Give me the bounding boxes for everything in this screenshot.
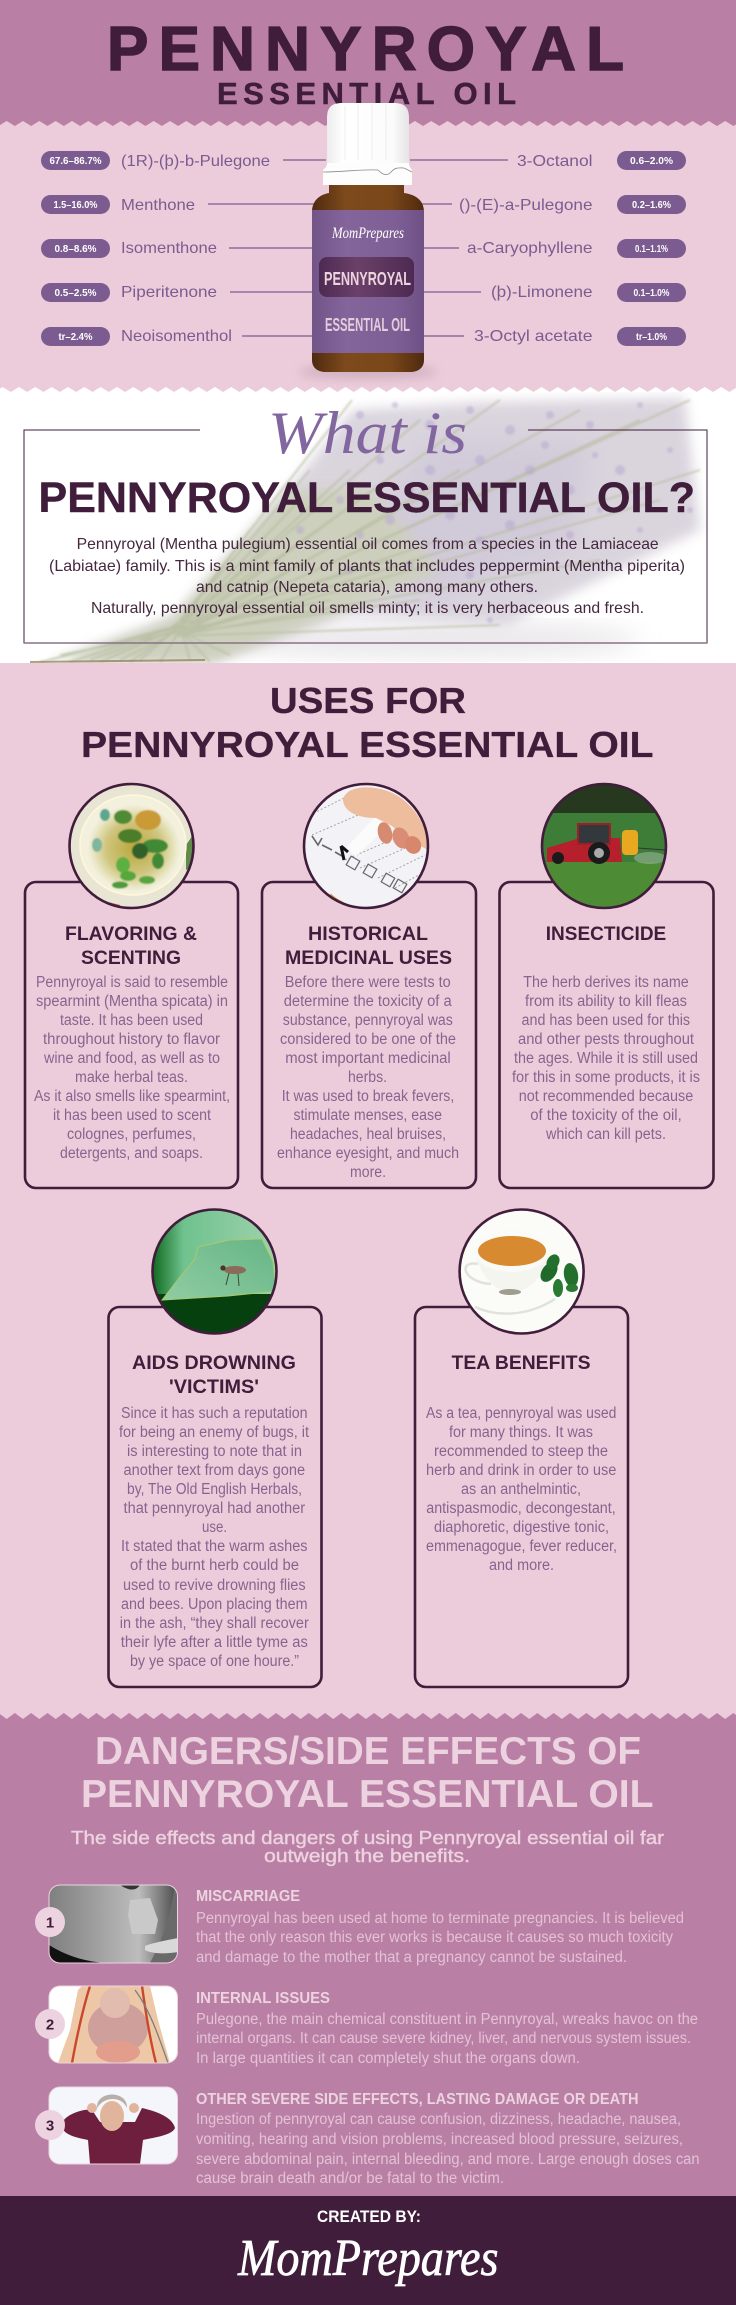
dangers section background xyxy=(0,1713,736,2196)
number badge 2 xyxy=(35,2009,65,2039)
item heading: OTHER SEVERE SIDE EFFECTS, LASTING DAMAGE OR DEATH xyxy=(196,2091,638,2108)
chemical constituents: left column: 67.6–86.7% xyxy=(50,155,102,167)
body text: use. xyxy=(202,1519,227,1536)
chemical constituents: left column: Menthone xyxy=(121,197,195,214)
body text: for this in some products, it is xyxy=(512,1069,700,1086)
body text xyxy=(512,974,700,1143)
item text: In large quantities it can completely shut the organs down. xyxy=(196,2050,580,2067)
danger item: internal issues xyxy=(35,1986,698,2067)
footer logo: MomPrepares xyxy=(237,2230,498,2287)
heading: pennyroyal essential oil?: PENNYROYAL ESSENTIAL OIL? xyxy=(38,474,695,522)
body text: antispasmodic, decongestant, xyxy=(426,1500,616,1517)
item text: severe abdominal pain, internal bleeding, and more. Large enough doses can xyxy=(196,2151,700,2168)
body text: not recommended because xyxy=(519,1088,693,1105)
icon: essential oil bottle xyxy=(298,103,438,379)
heading xyxy=(132,1352,296,1398)
body text: spearmint (Mentha spicata) in xyxy=(36,993,228,1010)
body text: Since it has such a reputation xyxy=(121,1405,308,1422)
body text: It stated that the warm ashes xyxy=(121,1538,308,1555)
uses section background xyxy=(0,663,736,1713)
photo: man holding head xyxy=(49,2087,178,2164)
chemical constituents: right column: 0.1–1.1% xyxy=(635,243,668,255)
body text: as an anthelmintic, xyxy=(461,1481,581,1498)
photo: dried pennyroyal bunch xyxy=(30,398,700,662)
body text: in the ash, “they shall recover xyxy=(120,1615,309,1632)
intro paragraph: Naturally, pennyroyal essential oil smells minty; it is very herbaceous and fresh. xyxy=(91,600,644,617)
body text: which can kill pets. xyxy=(545,1126,666,1143)
heading: FLAVORING & xyxy=(65,923,197,945)
item text: Pennyroyal has been used at home to terminate pregnancies. It is believed xyxy=(196,1910,684,1927)
body text: of the burnt herb could be xyxy=(130,1557,299,1574)
body text xyxy=(426,1405,617,1574)
chemical constituents: right column: 0.2–1.6% xyxy=(632,199,672,211)
script heading: what is: What is xyxy=(268,400,467,466)
body text: the ages. While it is still used xyxy=(514,1050,698,1067)
body text: substance, pennyroyal was xyxy=(283,1012,453,1029)
number badge 1 xyxy=(35,1907,65,1937)
body text: headaches, heal bruises, xyxy=(290,1126,446,1143)
item text: and damage to the mother that a pregnancy cannot be sustained. xyxy=(196,1949,627,1966)
body text: from its ability to kill fleas xyxy=(525,993,687,1010)
heading: SCENTING xyxy=(81,947,181,969)
title: ESSENTIAL OIL xyxy=(217,76,516,111)
white "what is" section background xyxy=(0,387,736,663)
body text: determine the toxicity of a xyxy=(284,993,452,1010)
photo: tea bowl with mint xyxy=(70,784,194,910)
number badge 3 xyxy=(35,2110,65,2140)
body text: and other pests throughout xyxy=(518,1031,695,1048)
body text: is interesting to note that in xyxy=(127,1443,302,1460)
body text: that pennyroyal had another xyxy=(124,1500,305,1517)
chemical constituents: right column: tr–1.0% xyxy=(636,331,668,343)
panel: historical medicinal uses xyxy=(262,784,476,1188)
body text: for being an enemy of bugs, it xyxy=(119,1424,310,1441)
item text: that the only reason this ever works is because it causes so much toxicity xyxy=(196,1929,673,1946)
chemical constituents: right column: 0.1–1.0% xyxy=(634,287,670,299)
body text xyxy=(119,1405,310,1670)
panel: insecticide xyxy=(500,783,714,1188)
body text xyxy=(34,974,230,1162)
body text: enhance eyesight, and much xyxy=(277,1145,459,1162)
heading: dangers and side effects: DANGERS/SIDE EFFECTS OF xyxy=(95,1730,641,1773)
chemical constituents: left column: 0.8–8.6% xyxy=(54,243,97,255)
item text xyxy=(196,2011,698,2067)
subtitle: The side effects and dangers of using Pennyroyal essential oil far xyxy=(71,1827,664,1848)
body text: for many things. It was xyxy=(449,1424,593,1441)
heading: HISTORICAL xyxy=(308,923,428,945)
intro paragraph: Pennyroyal (Mentha pulegium) essential oil comes from a species in the Lamiaceae xyxy=(77,536,659,553)
body text: recommended to steep the xyxy=(434,1443,608,1460)
body text: detergents, and soaps. xyxy=(60,1145,203,1162)
body text: herb and drink in order to use xyxy=(426,1462,616,1479)
intro paragraph: (Labiatae) family. This is a mint family of plants that includes peppermint (Mentha piperita) xyxy=(49,558,685,575)
icon: essential oil bottle: ESSENTIAL OIL xyxy=(325,314,410,335)
item text: cause brain death and/or be fatal to the victim. xyxy=(196,2170,504,2187)
heading xyxy=(65,923,197,969)
header band xyxy=(0,0,736,126)
body text: more. xyxy=(350,1164,386,1181)
body text: throughout history to flavor xyxy=(43,1031,220,1048)
body text: stimulate menses, ease xyxy=(293,1107,442,1124)
chemical constituents: right column xyxy=(410,151,686,346)
chemical constituents: left column: tr–2.4% xyxy=(58,331,93,343)
body text: Before there were tests to xyxy=(285,974,451,991)
body text: by ye space of one houre.” xyxy=(130,1653,299,1670)
photo: human anatomy xyxy=(49,1986,178,2063)
body text: their lyfe after a little tyme as xyxy=(121,1634,308,1651)
body text: make herbal teas. xyxy=(75,1069,188,1086)
chemical constituents: right column: (þ)-Limonene xyxy=(491,284,593,301)
body text: by, The Old English Herbals, xyxy=(127,1481,302,1498)
chemical constituents: left column: 0.5–2.5% xyxy=(54,287,97,299)
title: PENNYROYAL xyxy=(107,15,624,84)
footer xyxy=(0,2196,736,2305)
intro paragraph xyxy=(49,536,685,617)
body text: most important medicinal xyxy=(285,1050,451,1067)
panel: tea benefits xyxy=(415,1210,628,1687)
heading: INSECTICIDE xyxy=(546,923,666,945)
panel: flavoring and scenting xyxy=(25,784,238,1188)
body text: of the toxicity of the oil, xyxy=(530,1107,682,1124)
item text: vomiting, hearing and vision problems, increased blood pressure, seizures, xyxy=(196,2131,683,2148)
number badge 3: 3 xyxy=(46,2118,54,2134)
body text: and bees. Upon placing them xyxy=(121,1596,308,1613)
heading: dangers and side effects: PENNYROYAL ESSENTIAL OIL xyxy=(81,1773,654,1816)
body text: herbs. xyxy=(348,1069,387,1086)
item text: internal organs. It can cause severe kidney, liver, and nervous system issues. xyxy=(196,2030,691,2047)
chemical constituents: left column: 1.5–16.0% xyxy=(54,199,98,211)
icon: essential oil bottle: PENNYROYAL xyxy=(324,269,411,289)
number badge 2: 2 xyxy=(46,2016,54,2034)
chemical constituents: right column: 0.6–2.0% xyxy=(630,155,674,167)
what-is frame xyxy=(24,430,707,643)
body text: it has been used to scent xyxy=(53,1107,212,1124)
chemical constituents: left column: Isomenthone xyxy=(121,240,217,257)
chemical constituents: left column xyxy=(41,151,326,346)
body text: considered to be one of the xyxy=(280,1031,456,1048)
chemical constituents: right column: a-Caryophyllene xyxy=(467,240,593,257)
body text: another text from days gone xyxy=(124,1462,305,1479)
chemical constituents: left column: Neoisomenthol xyxy=(121,328,232,345)
heading: 'VICTIMS' xyxy=(169,1376,259,1398)
body text xyxy=(277,974,459,1181)
heading: dangers and side effects xyxy=(81,1730,654,1816)
heading: TEA BENEFITS xyxy=(452,1352,590,1374)
chemical constituents: left column: Piperitenone xyxy=(121,284,217,301)
body text: diaphoretic, digestive tonic, xyxy=(434,1519,609,1536)
danger item: miscarriage xyxy=(35,1885,684,1966)
body text: As it also smells like spearmint, xyxy=(34,1088,230,1105)
footer label: CREATED BY: xyxy=(317,2207,421,2226)
body text: used to revive drowning flies xyxy=(123,1577,306,1594)
number badge 1: 1 xyxy=(46,1914,54,1932)
item heading: MISCARRIAGE xyxy=(196,1888,300,1905)
chemical constituents: right column: 3-Octanol xyxy=(517,153,592,170)
body text: The herb derives its name xyxy=(523,974,689,991)
item text xyxy=(196,1910,684,1966)
heading: uses for pennyroyal essential oil xyxy=(81,680,654,765)
body text: taste. It has been used xyxy=(60,1012,203,1029)
subtitle: outweigh the benefits. xyxy=(264,1845,470,1866)
subtitle xyxy=(71,1827,664,1866)
body text: and has been used for this xyxy=(522,1012,690,1029)
heading: uses for pennyroyal essential oil: PENNYROYAL ESSENTIAL OIL xyxy=(81,724,654,765)
item text xyxy=(196,2111,700,2187)
item text: Pulegone, the main chemical constituent in Pennyroyal, wreaks havoc on the xyxy=(196,2011,698,2028)
body text: and more. xyxy=(489,1557,554,1574)
heading xyxy=(285,923,452,969)
heading: uses for pennyroyal essential oil: USES FOR xyxy=(270,680,466,721)
photo: fly on a leaf xyxy=(150,1205,280,1336)
body text: wine and food, as well as to xyxy=(43,1050,220,1067)
body text: emmenagogue, fever reducer, xyxy=(426,1538,617,1555)
body text: colognes, perfumes, xyxy=(67,1126,196,1143)
item text: Ingestion of pennyroyal can cause confusion, dizziness, headache, nausea, xyxy=(196,2111,681,2128)
item heading: INTERNAL ISSUES xyxy=(196,1990,330,2007)
panel: aids drowning victims xyxy=(108,1205,322,1687)
bottle label brand: MomPrepares xyxy=(331,225,404,242)
photo: cup of tea with mint xyxy=(460,1210,584,1334)
body text: As a tea, pennyroyal was used xyxy=(426,1405,616,1422)
chemical constituents: left column: (1R)-(þ)-b-Pulegone xyxy=(121,153,270,170)
intro paragraph: and catnip (Nepeta cataria), among many others. xyxy=(196,579,538,596)
heading: MEDICINAL USES xyxy=(285,947,452,969)
photo: hand ticking checklist xyxy=(304,784,428,908)
chemical constituents: right column: 3-Octyl acetate xyxy=(474,328,593,345)
photo: pregnant belly xyxy=(49,1885,178,1964)
photo: tractor spraying field xyxy=(540,783,670,910)
heading: AIDS DROWNING xyxy=(132,1352,296,1374)
chemical constituents: right column: ()-(E)-a-Pulegone xyxy=(459,197,593,214)
body text: Pennyroyal is said to resemble xyxy=(36,974,228,991)
danger item: other severe side effects xyxy=(35,2087,700,2187)
body text: It was used to break fevers, xyxy=(282,1088,454,1105)
